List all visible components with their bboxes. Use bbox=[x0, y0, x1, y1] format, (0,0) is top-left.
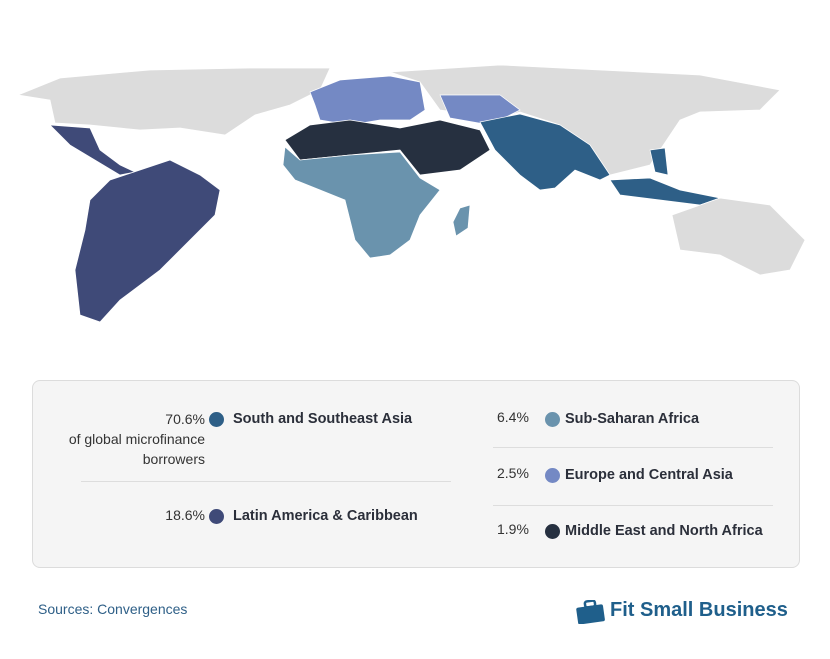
region: South and Southeast Asia bbox=[480, 114, 720, 205]
icon: briefcase bbox=[576, 600, 605, 624]
region: Latin America bbox=[50, 125, 220, 322]
legend item: Latin America: Latin America & Caribbean bbox=[233, 508, 418, 524]
region: North America bbox=[18, 68, 330, 135]
region: Russia and China bbox=[390, 65, 780, 175]
region: Australia bbox=[672, 198, 805, 275]
sources: Sources: Convergences bbox=[38, 601, 187, 617]
legend item: South and Southeast Asia: borrowers bbox=[143, 451, 205, 467]
legend item: Latin America bbox=[165, 507, 418, 524]
legend item: South and Southeast Asia: 70.6% bbox=[165, 411, 205, 427]
world map bbox=[20, 66, 804, 322]
legend item: Europe and Central Asia: 2.5% bbox=[497, 465, 529, 481]
legend item: Sub-Saharan Africa bbox=[497, 409, 700, 427]
legend item: Middle East and North Africa: Middle East and North Africa bbox=[565, 523, 763, 539]
legend item: South and Southeast Asia: South and Southeast Asia bbox=[233, 411, 412, 427]
legend item: Europe and Central Asia: Europe and Central Asia bbox=[565, 467, 733, 483]
legend item: Sub-Saharan Africa: Sub-Saharan Africa bbox=[565, 411, 699, 427]
legend panel bbox=[32, 380, 800, 568]
region: Europe and Central Asia bbox=[310, 76, 520, 125]
region: Sub-Saharan Africa bbox=[283, 147, 470, 258]
legend item: South and Southeast Asia bbox=[69, 411, 412, 467]
legend item: Latin America: 18.6% bbox=[165, 507, 205, 523]
legend item: Middle East and North Africa: 1.9% bbox=[497, 521, 529, 537]
legend item: Middle East and North Africa bbox=[497, 521, 763, 539]
region: Middle East and North Africa bbox=[285, 120, 490, 175]
logo: Fit Small Business bbox=[610, 599, 788, 621]
legend item: Sub-Saharan Africa: 6.4% bbox=[497, 409, 529, 425]
legend item: South and Southeast Asia: of global microfinance bbox=[69, 431, 205, 447]
legend item: Europe and Central Asia bbox=[497, 465, 733, 483]
